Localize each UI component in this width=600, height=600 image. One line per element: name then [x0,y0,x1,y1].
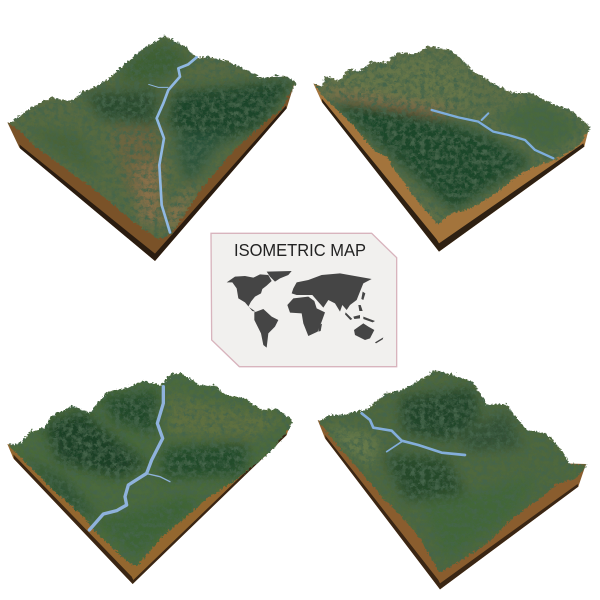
river [362,413,465,455]
soil sides [7,82,295,261]
river [157,57,197,232]
world map [227,271,383,348]
soil sides [318,420,586,589]
soil sides [313,83,589,252]
river [89,387,163,530]
title: ISOMETRIC MAP [234,240,366,260]
terrain block: top left [0,25,300,265]
terrain block: bottom left [7,372,293,584]
river [432,110,553,158]
terrain block: bottom right [318,370,588,590]
soil sides [7,419,292,584]
panel: map card [211,233,397,367]
terrain block: top right [313,46,591,252]
